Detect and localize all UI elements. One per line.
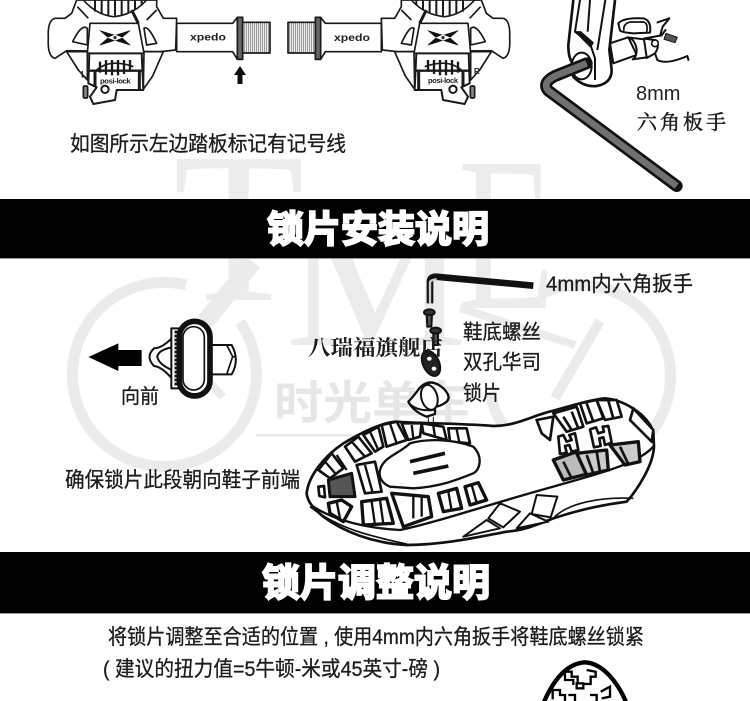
banner: cleat installation: 锁片安装说明	[267, 209, 489, 250]
heel lugs	[537, 400, 653, 480]
arrow marking the left pedal	[234, 66, 246, 84]
left pedal illustration: xpedo	[190, 33, 226, 44]
watermark: bicycle logo	[72, 108, 671, 467]
forward arrow	[88, 343, 142, 371]
icon: cleat with forward arrow	[88, 321, 236, 396]
icon: 4mm hex wrench	[430, 277, 533, 303]
sole stripes	[463, 495, 557, 537]
right pedal illustration: R	[474, 67, 480, 76]
labels: exploded parts: 鞋底螺丝	[463, 321, 541, 344]
watermark: bicycle logo: 时光单车	[274, 377, 470, 429]
labels: exploded parts: 锁片	[463, 382, 501, 405]
exploded cleat parts: screws, washer, cleat	[408, 309, 449, 433]
watermark: bicycle logo: E	[458, 112, 555, 356]
midsole plate	[380, 440, 480, 488]
instruction text: 将锁片调整至合适的位置 , 使用4mm内六角扳手将鞋底螺丝锁紧	[108, 626, 644, 649]
banner: cleat installation	[0, 199, 750, 259]
watermark: bicycle logo: T	[173, 108, 304, 347]
label: ensure cleat points to shoe front: 确保锁片此段朝向鞋子前端	[65, 469, 300, 492]
left pedal illustration: L	[81, 70, 87, 80]
labels: exploded parts: 双孔华司	[463, 351, 541, 374]
right pedal illustration: posi-lock	[428, 76, 459, 85]
icon: shoe sole tip	[543, 662, 627, 701]
right pedal illustration	[288, 0, 510, 104]
crank with 8mm hex wrench	[546, 0, 689, 186]
label: 8mm hex wrench: 六角板手	[637, 111, 726, 134]
watermark: bicycle logo: M	[285, 163, 467, 390]
caption: left pedal marked: 如图所示左边踏板标记有记号线	[70, 133, 346, 156]
instruction text: ( 建议的扭力值=5牛顿-米或45英寸-磅 )	[103, 658, 440, 681]
cleat	[149, 321, 236, 396]
label: 8mm hex wrench: 8mm	[636, 83, 680, 105]
labels: exploded parts	[463, 321, 541, 405]
label: forward: 向前	[121, 385, 159, 408]
banner: cleat adjustment	[0, 552, 750, 614]
left pedal illustration: posi-lock	[100, 77, 131, 86]
label: shop name overlay: 八瑞福旗舰店	[308, 336, 443, 360]
label: 4mm hex wrench: 4mm内六角扳手	[546, 273, 693, 296]
right pedal illustration: xpedo	[334, 33, 370, 44]
banner: cleat adjustment: 锁片调整说明	[262, 563, 490, 605]
instruction text	[103, 626, 644, 681]
left pedal illustration	[48, 0, 270, 104]
illustration: shoe sole	[307, 398, 654, 545]
front lugs	[318, 422, 487, 527]
label: 8mm hex wrench	[636, 83, 726, 134]
